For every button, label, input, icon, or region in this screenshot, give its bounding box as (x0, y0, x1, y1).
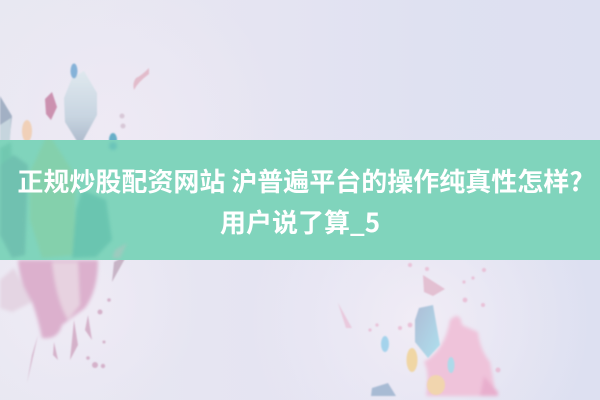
title (17, 162, 583, 240)
right splash: crystals (371, 275, 454, 396)
banner (0, 140, 600, 260)
crystal shard at banner edge (112, 255, 127, 282)
paint showing through banner (0, 140, 126, 259)
left splash: pink paint (0, 260, 98, 338)
title: 正规炒股配资网站 沪普遍平台的操作纯真性怎样? (17, 162, 583, 199)
left splash: drips and speckles (27, 298, 111, 383)
title: 用户说了算_5 (220, 203, 380, 240)
left splash: crystals (0, 64, 149, 158)
right splash: pink paint (424, 316, 498, 396)
right splash: speckles (338, 263, 500, 372)
